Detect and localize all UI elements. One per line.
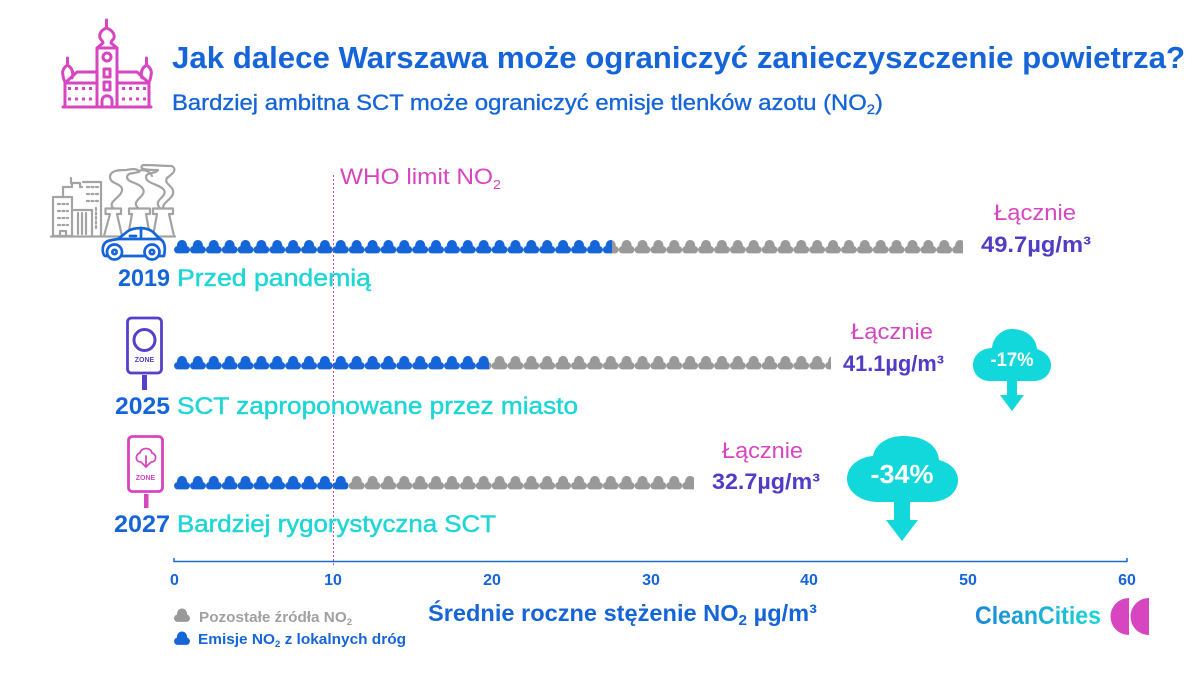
- callout: -17% cloud: -17%: [990, 349, 1034, 371]
- row 2027: cloud bar: [174, 476, 694, 490]
- axis title: 2: [739, 612, 747, 629]
- row 2019: total: 49.7µg/m³: [981, 232, 1091, 257]
- x axis: 50: [959, 572, 977, 589]
- icon: town hall: [63, 20, 151, 107]
- icon: stricter zone sign: ZONE: [136, 475, 156, 482]
- WHO limit line: [332, 175, 334, 566]
- row 2025: cloud bar: [174, 356, 831, 370]
- title: Jak dalece Warszawa może ograniczyć zanieczyszczenie powietrza?: [172, 40, 1185, 75]
- row 2025: total: Łącznie: [851, 319, 933, 344]
- row 2027: description: Bardziej rygorystyczna SCT: [177, 511, 496, 538]
- icon: city and factory: [51, 165, 175, 236]
- icon: low emission zone sign: ZONE: [135, 357, 155, 364]
- row 2027: total: [712, 438, 820, 494]
- row 2019: total: Łącznie: [994, 200, 1076, 225]
- icon: stricter zone sign: [128, 436, 162, 508]
- axis title: µg/m³: [747, 600, 817, 626]
- x axis: [170, 558, 1136, 589]
- row 2027: total: Łącznie: [722, 438, 803, 463]
- x axis: 0: [170, 572, 179, 589]
- x axis: 40: [800, 572, 818, 589]
- x axis: 10: [324, 572, 342, 589]
- callout: -34% cloud: -34%: [870, 459, 934, 489]
- row 2027: label: 2027: [114, 511, 170, 538]
- x axis: 60: [1118, 572, 1136, 589]
- x axis: 30: [642, 572, 660, 589]
- logo: Clean Cities: [975, 598, 1149, 635]
- WHO limit label: WHO limit NO: [340, 164, 478, 189]
- legend: z lokalnych dróg: [280, 632, 406, 648]
- legend: Emisje NO: [198, 632, 271, 648]
- row 2019: cloud bar: [174, 240, 963, 254]
- legend: 2: [347, 617, 352, 627]
- legend: [174, 608, 406, 649]
- WHO limit label: 2: [493, 177, 501, 192]
- x axis: 20: [483, 572, 501, 589]
- callout: -34% cloud: [847, 436, 958, 541]
- logo: Clean Cities: CleanCities: [975, 602, 1101, 630]
- row 2019: label: 2019: [118, 265, 170, 292]
- subtitle: ): [875, 90, 883, 115]
- row 2025: description: SCT zaproponowane przez miasto: [177, 393, 578, 420]
- subtitle: Bardziej ambitna SCT może ograniczyć emisje tlenków azotu (NO: [172, 90, 828, 115]
- row 2019: total: [981, 200, 1091, 257]
- icon: low emission zone sign: [128, 318, 162, 390]
- row 2019: description: Przed pandemią: [177, 265, 372, 292]
- icon: car: [103, 228, 165, 260]
- legend: 2: [275, 639, 280, 649]
- axis title: Średnie roczne stężenie NO: [428, 600, 731, 626]
- row 2027: total: 32.7µg/m³: [712, 469, 820, 494]
- row 2025: total: 41.1µg/m³: [843, 351, 944, 376]
- subtitle: 2: [867, 101, 875, 117]
- legend: Pozostałe źródła NO: [199, 610, 339, 626]
- callout: -17% cloud: [973, 329, 1051, 411]
- row 2025: label: 2025: [115, 393, 170, 420]
- row 2025: total: [843, 319, 944, 376]
